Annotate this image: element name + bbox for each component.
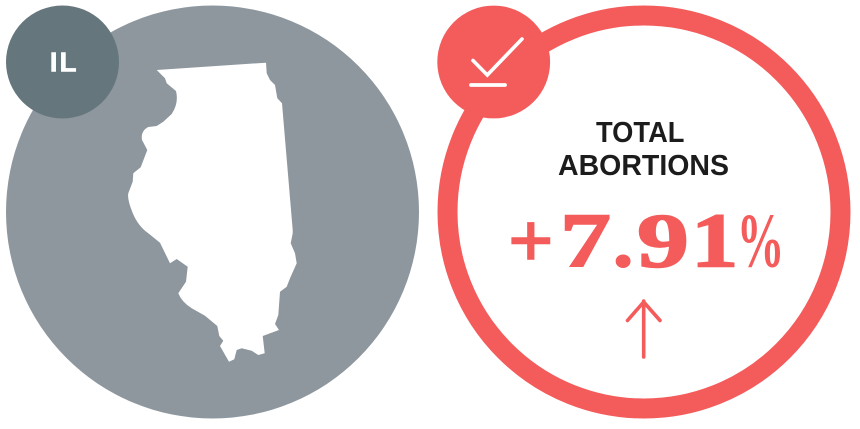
panel: state map	[6, 6, 419, 418]
badge: state abbreviation: IL	[50, 47, 77, 78]
panel: total abortions	[437, 6, 840, 408]
value: percent change: +	[508, 198, 554, 284]
heading: ABORTIONS	[558, 150, 729, 182]
value: percent change: %	[737, 198, 784, 284]
value: percent change	[508, 198, 784, 284]
arrow: up	[628, 301, 660, 357]
value: percent change: 9	[637, 198, 689, 284]
gray background circle	[6, 6, 419, 418]
heading: TOTAL	[596, 117, 684, 149]
icon: check mark badge	[437, 6, 550, 118]
map: Illinois outline	[128, 63, 297, 362]
value: percent change: .	[612, 198, 634, 284]
value: percent change: 1	[691, 198, 738, 284]
badge: state abbreviation	[6, 6, 119, 118]
red ring	[448, 16, 840, 408]
value: percent change: 7	[560, 198, 611, 284]
